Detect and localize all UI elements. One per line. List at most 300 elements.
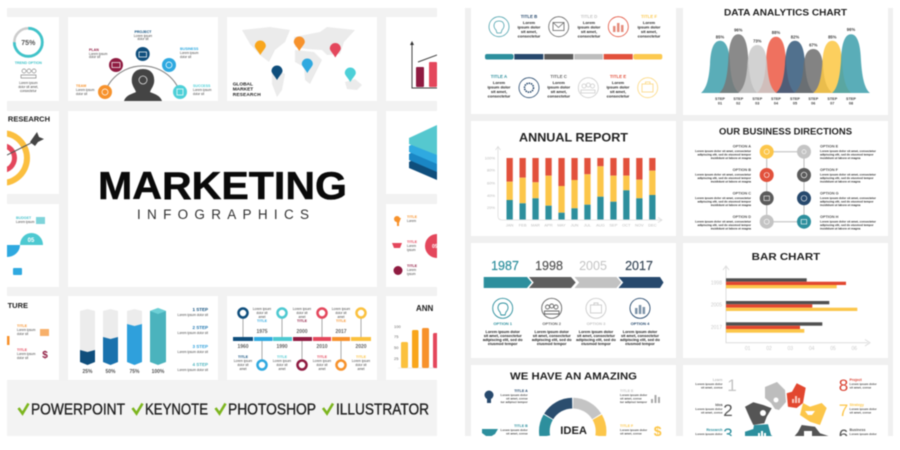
panel: colored timeline: dolor sit: [316, 363, 328, 367]
panel: isometric percentage bars: 75%: [129, 369, 140, 375]
right options: adipiscing elit, sed do eiusmod tempor: [820, 152, 874, 156]
panel: colored timeline: Lorem ipsum: [273, 359, 292, 363]
panel: colored timeline: TITLE: [317, 355, 328, 359]
right options: OPTION H: [820, 215, 839, 219]
panel: data analytics chart: 85%: [716, 34, 724, 40]
panel: colored timeline: amet: [357, 367, 365, 371]
panel: donut 75 percent: [7, 17, 59, 101]
panel: we have an amazing idea: IDEA: [560, 425, 587, 437]
panel: future options: TITLE: [17, 348, 28, 352]
panel: donut 75 percent: consectetur: [20, 89, 37, 93]
stacked bar chart: 40%: [487, 193, 495, 198]
panel: annual bars clipped: ANN: [416, 304, 434, 313]
stacked bar chart: OCT: [622, 222, 631, 228]
left options: OPTION C: [733, 192, 751, 196]
numbered labels right: sit amet, conse: [850, 386, 872, 390]
panel: red circle options: Lorem: [407, 219, 416, 223]
panel: data analytics chart: STEP: [752, 97, 763, 101]
option text above: Lorem: [523, 20, 536, 25]
panel: head with arc of ideas: SUCCESS: [193, 84, 211, 88]
option text below: TITLE A: [491, 74, 508, 79]
option text above: consectetur: [578, 34, 601, 38]
option text: eiusmod tempor: [581, 342, 611, 346]
numbered labels left: Lorem ipsum dolor: [695, 407, 723, 411]
panel: head with arc of ideas: PROJECT: [135, 30, 152, 34]
panel: isometric percentage bars: 100%: [152, 369, 165, 375]
bell chart: [701, 34, 870, 93]
left options: OPTION D: [733, 215, 751, 219]
stacked bar chart: APR: [544, 222, 553, 228]
option text: eiusmod tempor: [625, 342, 655, 346]
side titles: sit amet, conse: [506, 396, 528, 400]
right options: adipiscing elit, sed do eiusmod tempor: [820, 223, 874, 227]
horizontal bars: 2017: [711, 325, 722, 331]
panel: head with arc of ideas: Lorem ipsum: [134, 34, 153, 38]
panel: red circle options: Lorem: [407, 268, 416, 272]
panel: year arrows timeline: 1987: [491, 259, 519, 273]
horizontal bars: 1998: [711, 280, 722, 286]
option text below: consectetur: [607, 94, 630, 98]
option text below: TITLE C: [550, 74, 568, 79]
panel: colored timeline: Lorem ipsum: [234, 359, 253, 363]
right options: Lorem ipsum dolor sit amet, consectetur: [820, 149, 877, 153]
panel: data analytics chart: 02: [736, 102, 740, 106]
stacked bar chart: MAY: [557, 222, 566, 228]
panel: red circle options: [386, 204, 438, 287]
option text: eiusmod tempor: [488, 342, 518, 346]
numbered labels left: Idea: [715, 403, 723, 407]
panel: head with arc of ideas: dolor sit: [137, 37, 149, 41]
option text: OPTION 4: [631, 321, 650, 326]
panel: head with arc of ideas: [68, 17, 218, 101]
option text below: Lorem: [493, 80, 506, 85]
panel: data analytics chart: 01: [718, 102, 722, 106]
right collage: [465, 0, 893, 445]
panel: colored timeline: dolor sit: [276, 363, 288, 367]
option text below: sit amet,: [551, 89, 567, 94]
panel: colored timeline: amet: [258, 315, 266, 319]
panel: colored timeline: amet: [337, 315, 345, 319]
left options: incididunt ut labore et magna: [711, 226, 751, 230]
panel: future options: Lorem ipsum: [17, 352, 36, 356]
panel: annual bars clipped: [386, 296, 440, 380]
panel: data analytics chart: 88%: [772, 30, 780, 35]
panel: data analytics chart: 67%: [809, 42, 818, 48]
option text: Lorem ipsum dolor: [623, 330, 658, 334]
option text: eiusmod tempor: [537, 342, 567, 346]
panel: data analytics chart: 08: [849, 102, 853, 106]
numbered labels left: sit amet, conse: [701, 410, 723, 414]
panel: data analytics chart: STEP: [771, 97, 781, 101]
side titles: $: [654, 423, 662, 439]
panel: future options: [7, 296, 59, 380]
panel: main title: [68, 111, 377, 287]
panel: data analytics chart: 96%: [734, 28, 743, 32]
option circles: [760, 145, 811, 229]
panel: data analytics chart: STEP: [733, 97, 744, 101]
panel: our business directions: OUR BUSINESS DIRECTIONS: [719, 126, 852, 136]
bottom band: software list: POWERPOINT: [31, 401, 125, 418]
panel: annual bars clipped: 100: [394, 324, 401, 329]
option text: sit amet, consectetur: [533, 334, 571, 338]
left options: [695, 144, 752, 230]
panel: data analytics chart: 06: [811, 102, 815, 106]
numbered labels right: [839, 376, 878, 445]
numbered labels right: 6: [839, 426, 848, 445]
panel: year arrows timeline: 2005: [579, 259, 607, 273]
left options: incididunt ut labore et magna: [711, 156, 751, 160]
right options: OPTION E: [820, 144, 839, 148]
option text below: ipsum dolor: [547, 84, 571, 90]
panel: colored timeline: dolor sit: [296, 311, 308, 315]
side titles: Lorem ipsum dolor: [501, 428, 529, 432]
stacked bar chart: SEP: [609, 222, 618, 228]
panel: isometric percentage bars: Lorem ipsum dolor sit: [178, 350, 208, 354]
panel: colored timeline: 1990: [276, 344, 288, 350]
panel: data analytics chart: 03: [755, 102, 759, 106]
panel: isometric percentage bars: Lorem ipsum dolor sit: [178, 331, 208, 335]
stacked bar chart: DEC: [648, 222, 657, 228]
horizontal bars: 2005: [711, 302, 722, 308]
panel: isometric percentage bars: 3 STEP: [192, 344, 208, 349]
option text: OPTION 1: [493, 321, 513, 326]
left options: adipiscing elit, sed do eiusmod tempor: [698, 223, 752, 227]
panel: annual report: [471, 121, 676, 236]
side titles: TITLE A: [514, 389, 528, 393]
numbered labels right: 8: [839, 376, 848, 395]
panel: data analytics chart: [683, 0, 888, 115]
option text: sit amet, consectetur: [577, 334, 616, 338]
panel: rising bars: [386, 17, 437, 101]
right options: incididunt ut labore et magna: [820, 226, 861, 230]
option text above: ipsum dolor: [518, 24, 541, 30]
right options: OPTION F: [820, 168, 839, 172]
panel: donut 75 percent: 75%: [21, 40, 36, 47]
panel: semicircle steps: 05: [28, 238, 35, 244]
option text: adipiscing elit, sed do: [576, 338, 617, 342]
panel: data analytics chart: 07: [830, 102, 834, 106]
numbered labels right: 7: [839, 401, 848, 420]
right options: incididunt ut labore et magna: [820, 203, 861, 207]
right options: incididunt ut labore et magna: [820, 156, 861, 160]
option text below: consectetur: [547, 94, 570, 98]
horizontal bars: 02: [766, 346, 772, 352]
panel: data analytics chart: STEP: [715, 97, 725, 101]
panel: donut 75 percent: dolor sit amet,: [18, 85, 38, 89]
option text above: TITLE F: [641, 14, 657, 19]
panel: data analytics chart: STEP: [790, 97, 800, 101]
panel: red circle options: TITLE: [407, 215, 418, 219]
side titles: Lorem ipsum dolor: [620, 428, 648, 432]
numbered labels left: 1: [727, 376, 737, 395]
panel: head with arc of ideas: TEAM: [76, 84, 86, 88]
panel: year arrows timeline: 1998: [535, 259, 563, 273]
stacked bar chart: 80%: [487, 168, 495, 172]
panel: semicircle steps: [7, 204, 59, 287]
panel: head with arc of ideas: dolor sit: [180, 55, 191, 59]
panel: colored timeline: TITLE: [277, 355, 288, 359]
panel: head with arc of ideas: dolor sit: [193, 92, 204, 96]
left options: OPTION A: [733, 144, 751, 148]
horizontal bars: 06: [852, 346, 857, 352]
panel: research target: [6, 111, 59, 194]
segmented bar: [485, 54, 662, 60]
panel: data analytics chart: STEP: [846, 97, 856, 101]
panel: future options: Lorem ipsum: [17, 328, 36, 332]
side titles: tur adipisci tempor: [620, 400, 648, 404]
panel: future options: TITLE: [17, 324, 28, 328]
gear pieces: [745, 382, 832, 438]
panel: bar chart: BAR CHART: [752, 251, 821, 263]
panel: head with arc of ideas: PLAN: [89, 48, 99, 52]
panel: colored timeline: TITLE: [297, 319, 308, 323]
stacked bar chart: MAR: [531, 222, 540, 228]
side titles: sit amet, conse: [620, 396, 642, 400]
subtitle: INFOGRAPHICS: [137, 207, 309, 222]
panel: year arrows timeline: 2017: [625, 259, 653, 273]
panel: isometric percentage bars: 4 STEP: [192, 362, 208, 367]
panel: colored timeline: dolor sit: [355, 363, 367, 367]
bottom band: software list: [17, 402, 429, 416]
left options: Lorem ipsum dolor sit amet, consectetur: [695, 172, 752, 176]
left options: adipiscing elit, sed do eiusmod tempor: [698, 200, 752, 204]
panel: our business directions: [683, 121, 888, 236]
numbered labels right: Project: [850, 378, 862, 382]
outlined icons: [489, 17, 658, 98]
numbered labels left: 3: [723, 425, 733, 444]
left options: Lorem ipsum dolor sit amet, consectetur: [695, 220, 752, 224]
panel: red circle options: TITLE: [407, 264, 418, 268]
panel: colored timeline: Lorem ipsum: [293, 307, 312, 311]
panel: colored timeline: 1975: [256, 329, 268, 335]
side titles: [482, 389, 662, 439]
side titles: Lorem ipsum dolor: [620, 393, 648, 397]
option text: adipiscing elit, sed do: [483, 338, 523, 342]
option text above: ipsum dolor: [638, 24, 661, 30]
option text: adipiscing elit, sed do: [620, 338, 661, 342]
panel: global market research map: [227, 17, 377, 101]
heading: ANNUAL REPORT: [519, 131, 629, 145]
right options: incididunt ut labore et magna: [820, 180, 861, 184]
panel: data analytics chart: STEP: [827, 97, 838, 101]
world map: [242, 27, 362, 97]
panel: red circle options: ipsum: [407, 248, 416, 252]
right options: OPTION G: [820, 192, 839, 196]
panel: semicircle steps: BUDGET: [16, 216, 32, 220]
panel: gear segments: [683, 365, 888, 445]
option text below: TITLE E: [610, 74, 626, 79]
option text below: ipsum dolor: [488, 84, 511, 90]
panel: colored timeline: 2020: [355, 344, 367, 350]
panel: head with arc of ideas: Lorem ipsum: [76, 88, 95, 92]
panel: isometric percentage bars: Lorem ipsum dolor sit: [178, 313, 208, 317]
side titles: sit amet, conse: [620, 432, 642, 436]
panel: colored timeline: 2000: [296, 329, 308, 335]
option text below: [488, 74, 630, 98]
side titles: TITLE B: [514, 424, 528, 428]
title: MARKETING: [98, 165, 347, 208]
option text: Lorem ipsum dolor: [535, 330, 569, 334]
option text: Lorem ipsum dolor: [579, 330, 614, 334]
left options: Lorem ipsum dolor sit amet, consectetur: [695, 196, 752, 200]
panel: data analytics chart: 05: [793, 102, 797, 106]
option text below: consectetur: [488, 94, 511, 98]
panel: red circle options: 05: [432, 244, 438, 250]
panel: data analytics chart: 82%: [791, 34, 799, 40]
stacked bar chart: JUL: [584, 222, 592, 228]
side titles: Lorem ipsum dolor: [501, 393, 529, 397]
option text: sit amet, consectetur: [621, 334, 660, 338]
panel: isometric percentage bars: 50%: [105, 369, 116, 375]
panel: data analytics chart: 04: [774, 102, 779, 106]
option text: adipiscing elit, sed do: [532, 338, 572, 342]
left options: adipiscing elit, sed do eiusmod tempor: [698, 152, 752, 156]
numbered labels right: Lorem ipsum dolor: [850, 407, 878, 411]
option text below: sit amet,: [610, 89, 626, 94]
panel: colored timeline: Lorem ipsum: [253, 307, 272, 311]
panel: colored timeline: amet: [278, 367, 286, 371]
map pins: [255, 36, 356, 82]
stacked bar chart: AUG: [596, 222, 605, 228]
panel: colored timeline: TITLE: [336, 319, 347, 323]
side titles: TITLE E: [620, 389, 634, 393]
panel: annual bars clipped: 50: [394, 345, 399, 350]
panel: data analytics chart: 85%: [828, 34, 837, 40]
numbered labels left: sit amet, conse: [701, 386, 723, 390]
side titles: sit amet, conse: [506, 432, 528, 436]
stacked bar chart: 100%: [485, 156, 495, 160]
numbered labels right: Business: [850, 428, 865, 432]
panel: colored timeline: amet: [239, 367, 247, 371]
panel: colored timeline: Lorem ipsum: [332, 307, 351, 311]
left options: adipiscing elit, sed do eiusmod tempor: [698, 176, 752, 180]
right options: adipiscing elit, sed do eiusmod tempor: [820, 176, 874, 180]
right options: adipiscing elit, sed do eiusmod tempor: [820, 200, 874, 204]
option text: sit amet, consectetur: [484, 334, 522, 338]
right options: Lorem ipsum dolor sit amet, consectetur: [820, 172, 877, 176]
numbered labels left: Lorem ipsum dolor: [695, 432, 723, 436]
left collage: [0, 8, 449, 436]
panel: year arrows timeline: [471, 243, 676, 358]
panel: future options: TURE: [8, 301, 28, 310]
numbered labels left: 2: [723, 401, 733, 420]
horizontal bars: 04: [809, 346, 815, 352]
right options: Lorem ipsum dolor sit amet, consectetur: [820, 220, 877, 224]
panel: future options: dolor sit: [17, 356, 28, 360]
panel: data analytics chart: STEP: [808, 97, 819, 101]
side titles: TITLE F: [620, 424, 634, 428]
numbered labels left: Research: [706, 428, 722, 432]
option text above: consectetur: [638, 34, 661, 38]
stacked bar chart: 60%: [487, 180, 495, 186]
numbered labels left: Lorem ipsum dolor: [695, 382, 723, 386]
donut idea: [544, 403, 601, 436]
horizontal bars: 03: [788, 346, 793, 352]
left options: incididunt ut labore et magna: [711, 203, 751, 207]
panel: research target: RESEARCH: [8, 114, 50, 124]
panel: head with arc of ideas: dolor sit: [76, 92, 87, 96]
panel: donut 75 percent: Lorem ipsum: [19, 81, 38, 85]
panel: data analytics chart: DATA ANALYTICS CHART: [724, 8, 847, 18]
panel: colored timeline: TITLE: [356, 355, 367, 359]
panel: isometric percentage bars: Lorem ipsum dolor sit: [178, 368, 208, 372]
bottom band: software list: PHOTOSHOP: [228, 401, 316, 418]
panel: future options: dolor sit: [17, 332, 28, 336]
right options: Lorem ipsum dolor sit amet, consectetur: [820, 196, 877, 200]
panel: isometric percentage bars: 25%: [82, 369, 93, 375]
panel: donut 75 percent: TREND OPTION: [15, 61, 42, 65]
panel: red circle options: ipsum: [407, 272, 416, 276]
option text: OPTION 3: [587, 321, 606, 326]
left options: incididunt ut labore et magna: [711, 180, 751, 184]
option text above: sit amet,: [521, 29, 537, 34]
panel: colored timeline: TITLE: [238, 355, 249, 359]
panel: annual bars clipped: 75: [394, 334, 399, 339]
bottom band: software list: ILLUSTRATOR: [336, 401, 429, 418]
option text below: Lorem: [612, 80, 625, 85]
option text: [483, 321, 661, 346]
left options: Lorem ipsum dolor sit amet, consectetur: [695, 149, 752, 153]
option text below: ipsum dolor: [607, 84, 630, 90]
panel: colored timeline: [227, 296, 377, 380]
right options: [820, 144, 877, 230]
numbered labels right: sit amet, conse: [850, 410, 872, 414]
option text below: sit amet,: [491, 89, 507, 94]
horizontal bars: [711, 266, 870, 352]
option text above: consectetur: [518, 34, 541, 38]
panel: future options: $: [42, 350, 48, 361]
numbered labels right: Lorem ipsum dolor: [850, 382, 878, 386]
side titles: tur adipisci tempor: [501, 400, 529, 404]
stacked bar chart: [485, 146, 662, 228]
numbered labels left: Learn: [713, 378, 722, 382]
panel: head with arc of ideas: dolor sit: [89, 55, 100, 59]
panel: isometric percentage bars: 2 STEP: [192, 325, 208, 330]
panel: colored timeline: 1960: [237, 344, 249, 350]
option text: Lorem ipsum dolor: [486, 330, 520, 334]
panel: we have an amazing idea: [471, 365, 676, 439]
option text above: [518, 14, 661, 38]
stacked bar chart: JAN: [506, 222, 513, 228]
panel: data analytics chart: 96%: [847, 27, 855, 32]
panel: data analytics chart: 73%: [753, 38, 762, 44]
panel: global market research map: RESEARCH: [233, 92, 261, 98]
panel: colored timeline: 2010: [316, 344, 328, 350]
stacked bar chart: JUN: [571, 222, 578, 228]
option text above: sit amet,: [641, 29, 657, 34]
panel: colored timeline: TITLE: [257, 319, 268, 323]
panel: colored timeline: dolor sit: [335, 311, 347, 315]
option text above: Lorem: [583, 20, 596, 25]
horizontal bars: 01: [745, 346, 751, 352]
horizontal bars: 05: [830, 346, 836, 352]
numbered labels right: Lorem ipsum dolor: [850, 432, 878, 436]
stacked bar chart: 20%: [487, 205, 495, 210]
panel: colored timeline: amet: [298, 315, 306, 319]
option text below: Lorem: [553, 80, 565, 85]
panel: colored timeline: amet: [318, 367, 326, 371]
panel: head with arc of ideas: Lorem ipsum: [193, 88, 212, 92]
panel: annual bars clipped: 25: [394, 356, 399, 361]
panel: we have an amazing idea: WE HAVE AN AMAZING: [510, 370, 637, 382]
panel: global market research map: MARKET: [233, 86, 253, 92]
panel: semicircle steps: Lorem ipsum: [16, 220, 35, 224]
left options: OPTION B: [733, 168, 751, 172]
panel: red circle options: Lorem: [407, 244, 416, 248]
option text above: TITLE B: [521, 14, 537, 19]
panel: global market research map: GLOBAL: [233, 82, 253, 88]
panel: head with arc of ideas: BUSINESS: [180, 47, 199, 51]
